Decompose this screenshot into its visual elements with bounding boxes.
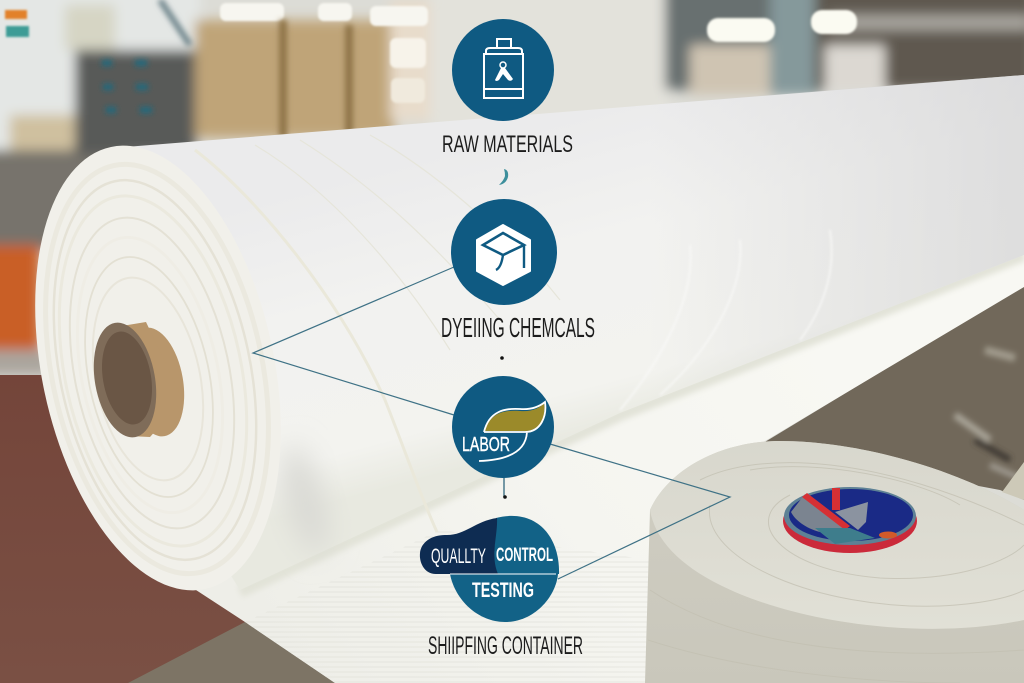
- spool hub: [783, 487, 917, 553]
- step 1: raw materials: [442, 19, 573, 185]
- fabric roll: [0, 75, 1024, 613]
- connector lines: [253, 267, 730, 579]
- step 3: labor: [452, 376, 554, 499]
- label: shipping container: SHIIPFING CONTAINER: [428, 632, 583, 660]
- roll end face: [0, 123, 318, 613]
- wooden table: [128, 622, 335, 683]
- label: raw materials: RAW MATERIALS: [442, 131, 573, 158]
- badge: quality control testing: [420, 516, 559, 622]
- label: dyeing chemicals: DYEIING CHEMCALS: [441, 312, 595, 343]
- text: quality: QUALLTY: [431, 545, 486, 568]
- cardboard core: [85, 318, 192, 442]
- fabric strand: [195, 150, 437, 532]
- text: control: CONTROL: [496, 545, 553, 566]
- step 2: dyeing chemicals: [441, 199, 595, 360]
- icon circle: cube: [451, 199, 557, 305]
- fabric sheet: [150, 240, 1024, 683]
- cotton spool: [645, 441, 1024, 683]
- floor: [0, 375, 260, 683]
- dot marker: [503, 495, 507, 499]
- icon circle: raw materials bottle: [452, 19, 554, 121]
- text: testing: TESTING: [472, 579, 534, 602]
- step 4: quality control testing: [420, 516, 583, 660]
- label: labor: LABOR: [462, 434, 510, 456]
- machinery at right: [760, 285, 1024, 500]
- crescent marker: [499, 169, 508, 185]
- dot marker: [500, 356, 504, 360]
